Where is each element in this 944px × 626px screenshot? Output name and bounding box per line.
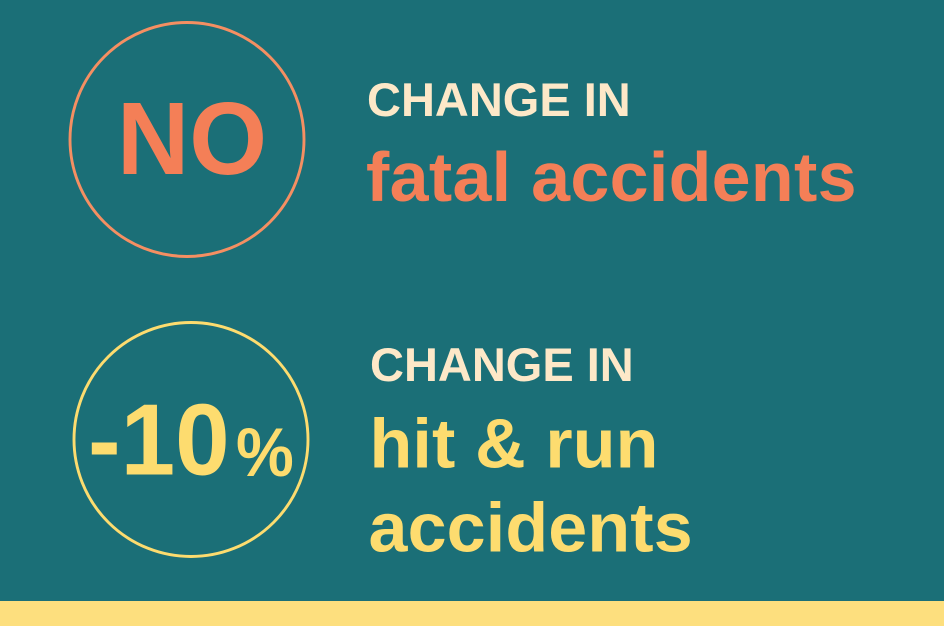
heading: change in: CHANGE IN — [367, 73, 631, 126]
heading: change in: CHANGE IN — [370, 338, 634, 391]
icon: circle with NO — [70, 22, 304, 256]
panel: fatal accidents — [70, 22, 857, 256]
icon: circle with -10%: % — [236, 416, 294, 491]
text: fatal accidents: fatal accidents — [366, 138, 857, 216]
panel: hit and run accidents — [74, 322, 693, 566]
text: hit & run accidents: hit & run — [370, 404, 659, 482]
text: hit & run accidents: accidents — [368, 488, 693, 566]
icon: circle with -10% — [74, 322, 308, 556]
icon: circle with NO: NO — [117, 81, 267, 196]
icon: circle with -10%: -10 — [88, 384, 230, 497]
footer band — [0, 601, 944, 626]
